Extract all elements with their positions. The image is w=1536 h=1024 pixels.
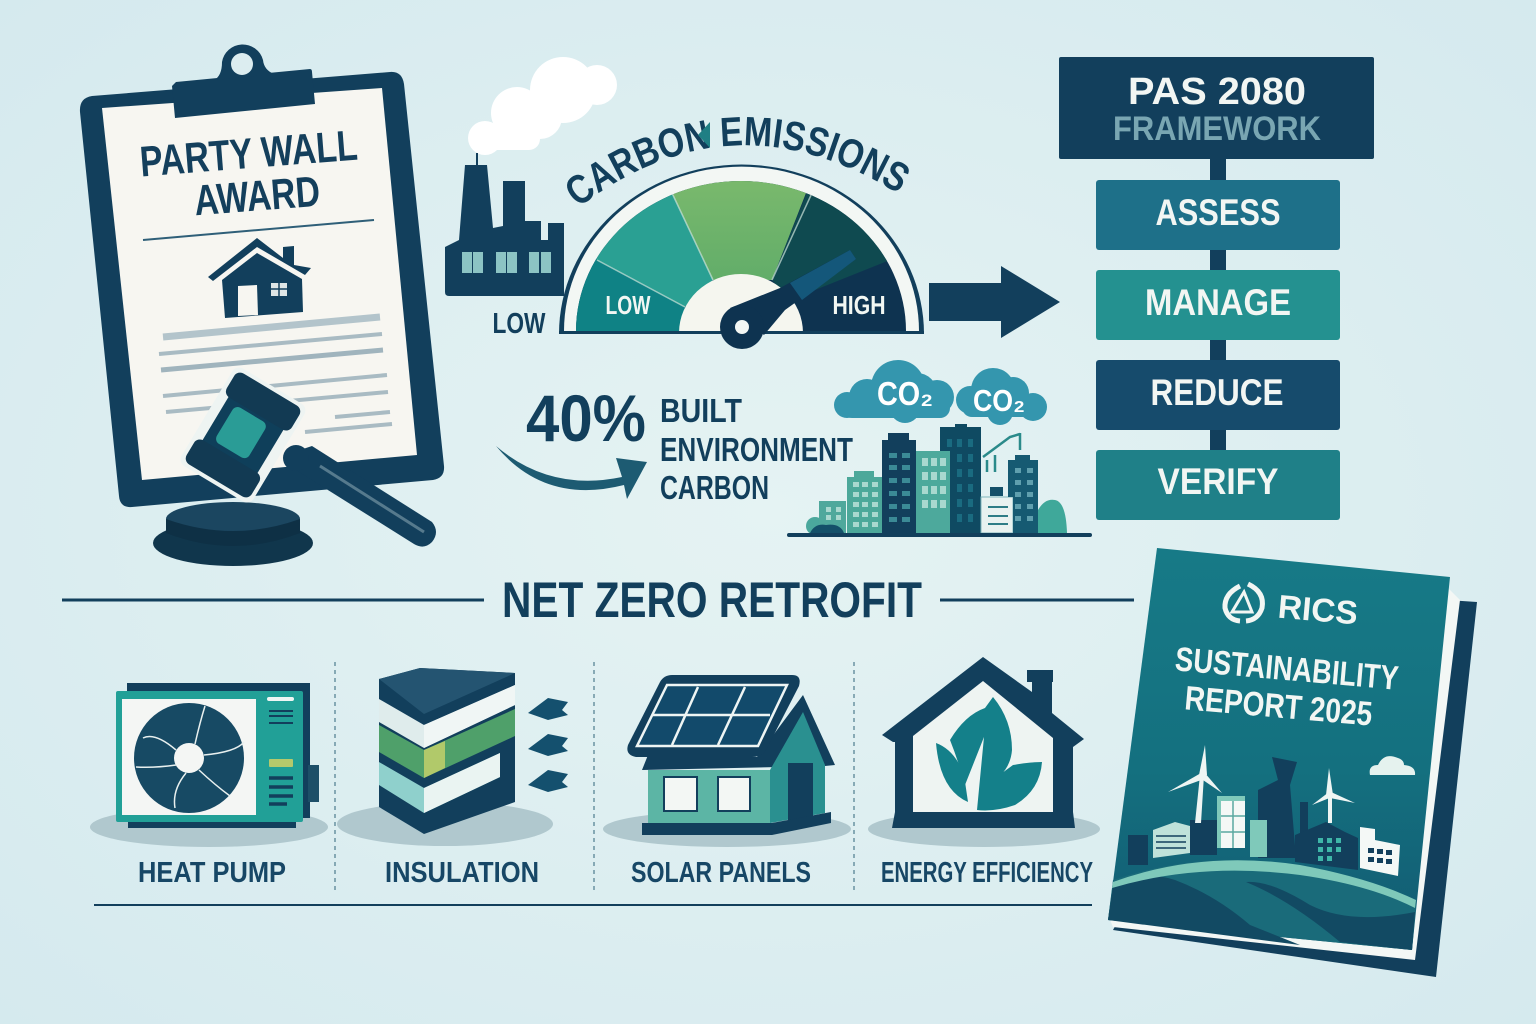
report back pages [1113, 590, 1477, 977]
heading: Party Wall Award: AWARD [192, 168, 322, 225]
step: reduce [1096, 360, 1340, 430]
report title: REPORT 2025 [1183, 679, 1374, 734]
CO2 cloud left [834, 360, 954, 423]
gauge: carbon emissions [492, 117, 924, 349]
report: RICS Sustainability Report 2025 [1108, 548, 1477, 977]
arrow: gauge to framework [929, 266, 1060, 338]
clipboard board [80, 72, 444, 507]
CO2 cloud left: CO₂ [877, 375, 933, 412]
icon: heat pump [90, 683, 328, 847]
smoke cloud [468, 57, 617, 155]
gauge needle [720, 250, 856, 349]
framework header: FRAMEWORK [1113, 110, 1321, 148]
step: verify [1096, 450, 1340, 520]
statistic: 40% built environment carbon: 40% [526, 381, 646, 455]
RICS logo: RICS [1276, 588, 1359, 631]
label: insulation: INSULATION [385, 857, 539, 889]
framework header: PAS 2080 [1128, 71, 1306, 113]
heading: Party Wall Award [138, 122, 363, 229]
gauge title: CARBON EMISSIONS [567, 117, 909, 203]
curved arrow [496, 446, 647, 499]
step: manage [1096, 270, 1340, 340]
statistic: 40% built environment carbon [496, 381, 862, 506]
icon: city skyline with CO2 clouds [787, 360, 1092, 537]
label: energy efficiency: ENERGY EFFICIENCY [881, 857, 1093, 889]
report cover [1108, 548, 1450, 950]
step: assess [1096, 180, 1340, 250]
gauge labels: LOW [606, 290, 651, 320]
gauge labels [492, 290, 886, 340]
gauge dial [559, 165, 924, 335]
statistic: 40% built environment carbon: ENVIRONMENT [660, 431, 853, 468]
statistic: 40% built environment carbon: CARBON [660, 469, 769, 506]
report title: SUSTAINABILITY [1174, 640, 1400, 698]
icon: factory with smoke cloud [445, 57, 617, 296]
gauge labels: HIGH [832, 290, 886, 320]
paper sheet [102, 88, 417, 480]
clipboard clip [172, 44, 315, 118]
framework header [1059, 57, 1374, 159]
report title [1170, 640, 1400, 736]
panel: PAS 2080 framework flow [1059, 57, 1374, 520]
icon: gavel and sound block [153, 365, 436, 566]
icon: insulation layers [337, 668, 568, 846]
step: reduce: REDUCE [1150, 372, 1284, 413]
step: manage: MANAGE [1145, 282, 1291, 323]
step: verify: VERIFY [1158, 461, 1279, 502]
heading: Net Zero Retrofit: NET ZERO RETROFIT [502, 572, 922, 628]
label: heat pump: HEAT PUMP [138, 857, 286, 889]
RICS logo [1225, 584, 1359, 631]
CO2 cloud right [956, 368, 1047, 425]
icon: house [208, 238, 311, 318]
icon: energy efficiency house with leaf [868, 657, 1100, 847]
statistic: 40% built environment carbon: BUILT [660, 392, 742, 429]
clipboard: Party Wall Award [80, 44, 444, 507]
CO2 cloud right: CO₂ [973, 383, 1025, 418]
icon: solar panel house [603, 675, 851, 847]
buildings [806, 424, 1067, 535]
step: assess: ASSESS [1156, 192, 1280, 233]
text lines on document [159, 317, 392, 432]
heading: Party Wall Award: PARTY WALL [138, 122, 359, 187]
label: solar panels: SOLAR PANELS [631, 857, 811, 889]
gauge labels: LOW [492, 308, 546, 340]
report illustration: green city [1108, 745, 1416, 950]
